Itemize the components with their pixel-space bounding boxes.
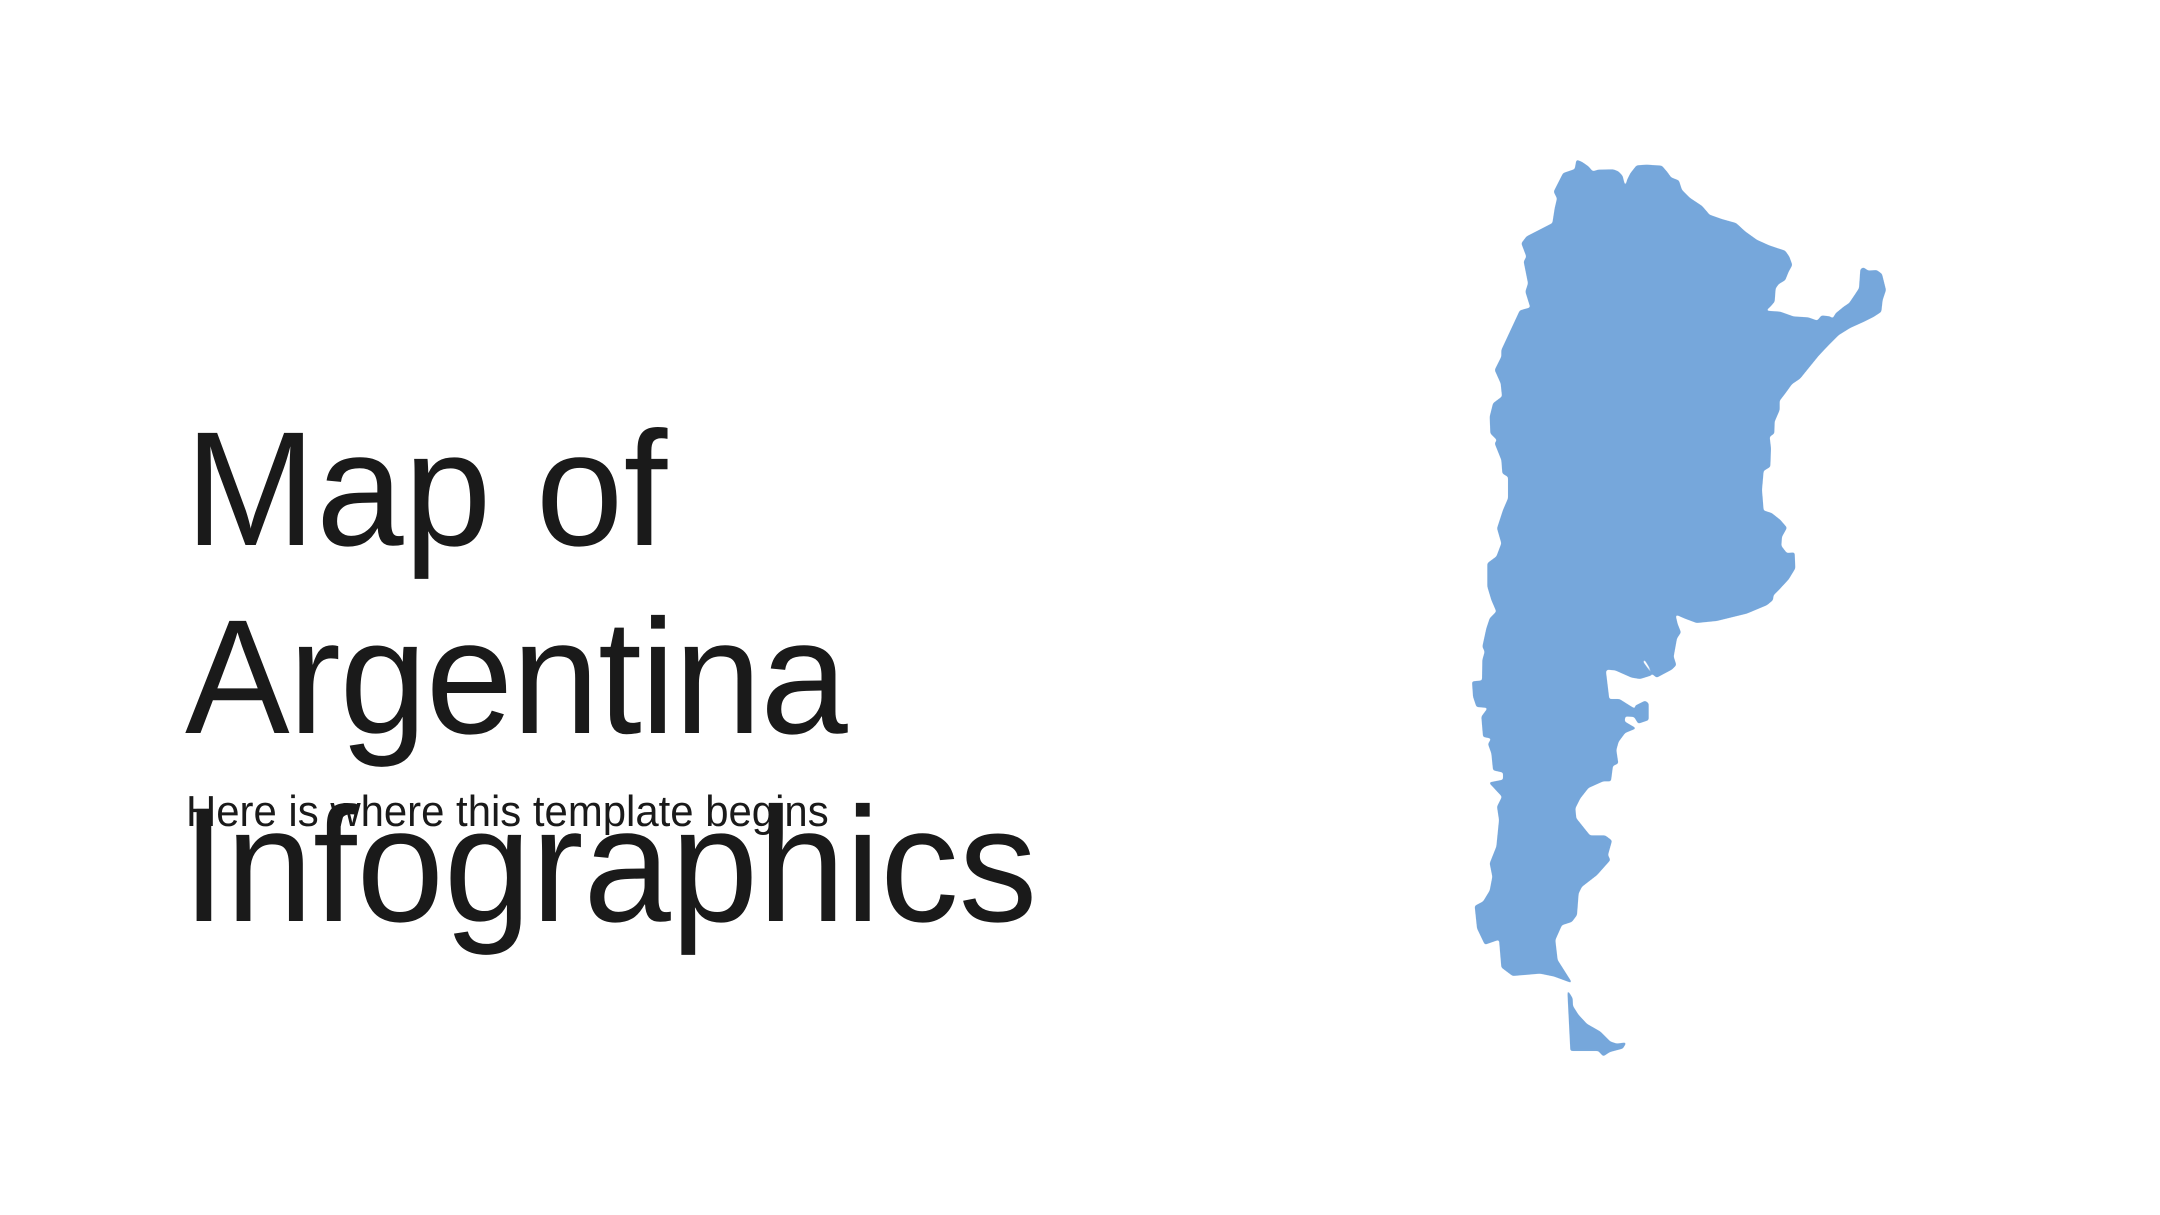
title: Argentina — [185, 585, 847, 768]
subtitle text: Here is where this template begins — [186, 788, 829, 836]
mainland Argentina — [1472, 160, 1886, 983]
title: Infographics — [182, 773, 1037, 956]
Tierra del Fuego — [1568, 991, 1626, 1056]
title — [182, 397, 1037, 956]
title: Map of — [185, 397, 668, 580]
